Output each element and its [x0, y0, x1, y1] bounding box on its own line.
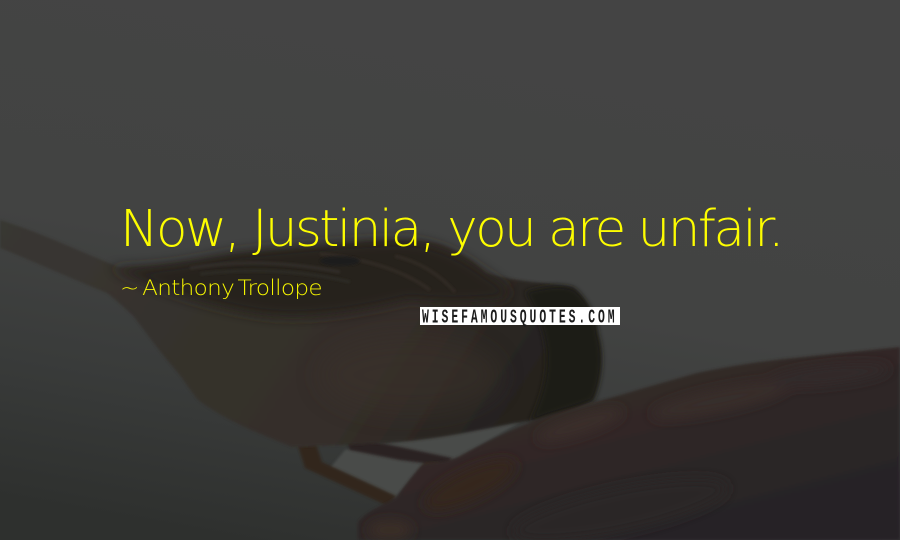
wing dark patch — [320, 256, 360, 266]
wing feathers — [190, 254, 455, 292]
sparrow body — [0, 220, 601, 447]
light gap behind legs — [330, 422, 520, 498]
sparrow head — [525, 286, 601, 422]
sparrow — [0, 220, 601, 506]
bread crust — [358, 347, 900, 540]
sparrow wing — [110, 240, 509, 317]
author attribution: ~ Anthony Trollope — [120, 276, 322, 300]
sparrow legs — [298, 436, 452, 506]
watermark badge: WISEFAMOUSQUOTES.COM — [422, 307, 618, 329]
bread texture — [368, 360, 891, 540]
quote text: Now, Justinia, you are unfair. — [120, 200, 782, 259]
breast glow — [320, 337, 500, 413]
